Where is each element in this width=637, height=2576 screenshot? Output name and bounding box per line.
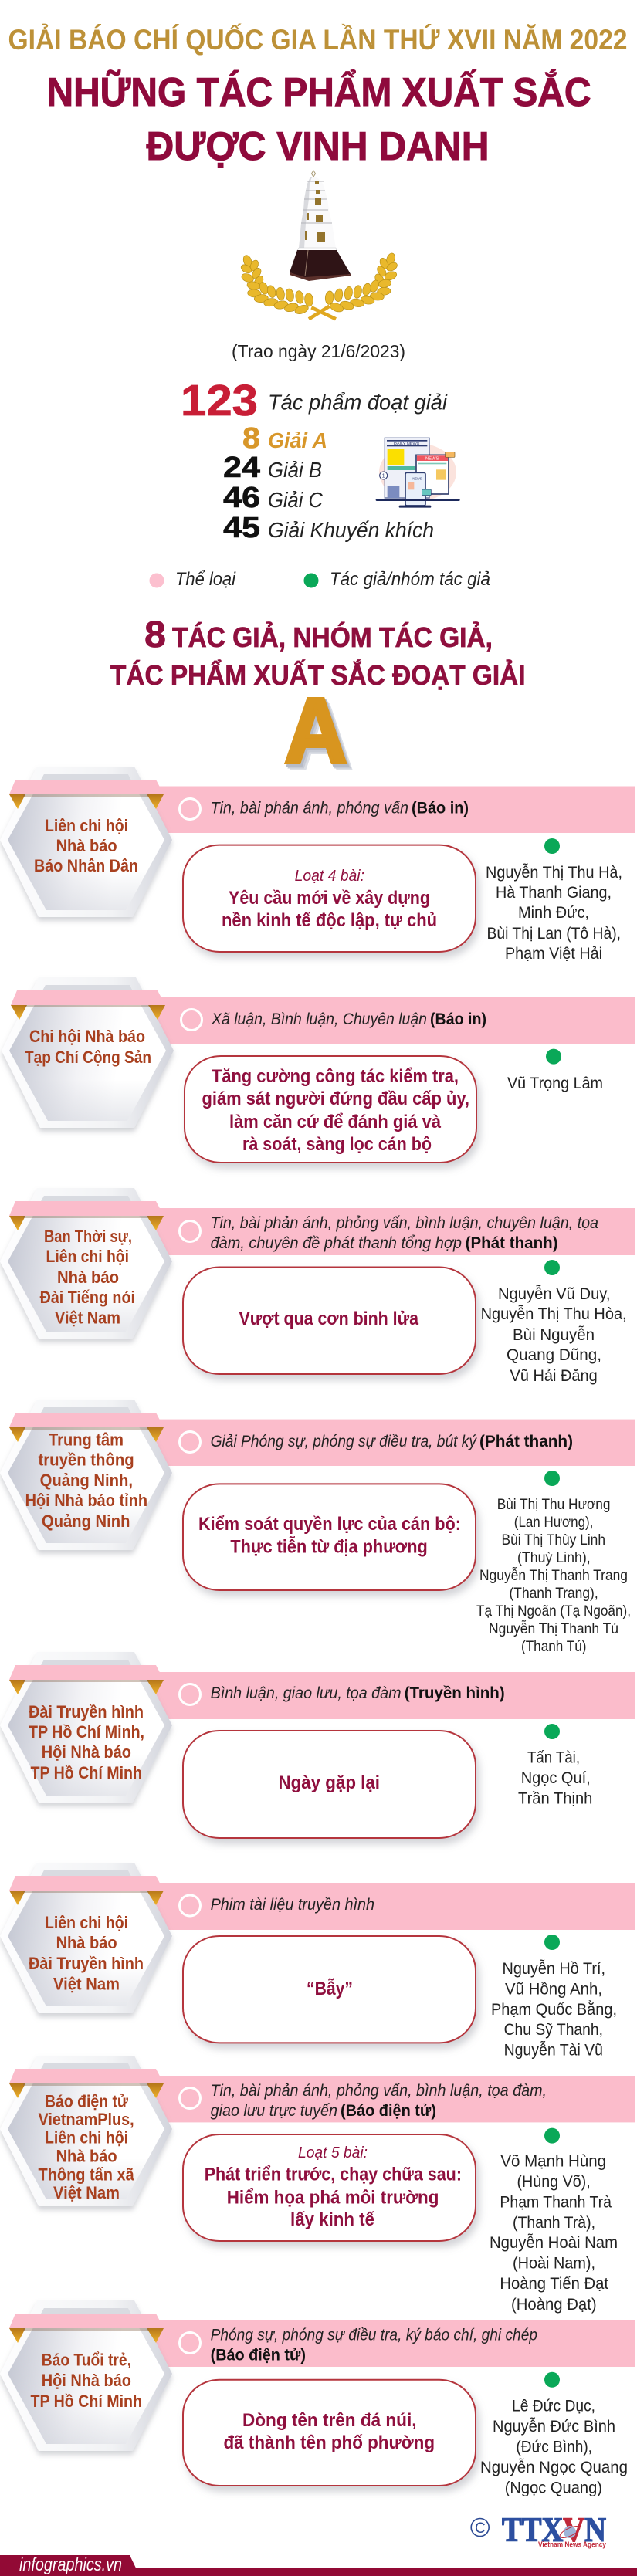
- panel: block 6: [0, 1863, 635, 2060]
- organisation: [39, 2092, 134, 2202]
- panel: block 3: [0, 1188, 635, 1385]
- category: (Báo điện tử): [341, 2101, 436, 2120]
- authors: Chu Sỹ Thanh,: [504, 2020, 603, 2039]
- stats: prize counts: Giải A: [268, 428, 327, 452]
- work title box: [183, 2380, 476, 2486]
- authors: Bùi Thị Thùy Linh: [502, 1532, 605, 1549]
- title: main heading: [46, 69, 591, 169]
- stats: prize counts: Giải C: [268, 488, 324, 512]
- organisation: Quảng Ninh: [42, 1511, 130, 1531]
- category: (Truyền hình): [405, 1684, 505, 1702]
- authors: Quang Dũng,: [507, 1346, 601, 1364]
- icon: newspaper, tablet and phone: NEWS: [412, 476, 422, 480]
- authors: [476, 1496, 631, 1655]
- work title box: [183, 1268, 476, 1374]
- category: (Phát thanh): [479, 1432, 573, 1450]
- icon: newspaper, tablet and phone: DAILY NEWS: [394, 442, 420, 446]
- stats: prize counts: 46: [223, 482, 260, 514]
- organisation: Trung tâm: [49, 1430, 124, 1450]
- organisation: Nhà báo: [56, 2146, 117, 2166]
- authors: Võ Mạnh Hùng: [500, 2152, 606, 2171]
- icon: tower trophy with golden wheat wreath: [239, 171, 398, 319]
- organisation: Liên chi hội: [45, 816, 128, 835]
- work title box: Tăng cường công tác kiểm tra,: [212, 1066, 459, 1087]
- award date: (Trao ngày 21/6/2023): [232, 341, 405, 361]
- authors: Bùi Thị Thu Hương: [497, 1496, 610, 1513]
- authors: (Thanh Tú): [521, 1638, 587, 1655]
- work title box: [183, 1484, 476, 1590]
- organisation: Liên chi hội: [45, 2128, 128, 2148]
- work title box: Vượt qua cơn binh lửa: [239, 1308, 418, 1329]
- authors: Nguyễn Hồ Trí,: [502, 1958, 605, 1978]
- organisation: [31, 2351, 142, 2411]
- organisation: [34, 816, 138, 875]
- category: (Báo điện tử): [211, 2345, 306, 2364]
- category: Xã luận, Bình luận, Chuyên luận: [211, 1010, 427, 1028]
- authors: [480, 2397, 628, 2497]
- authors: (Thanh Trà),: [513, 2213, 595, 2232]
- icon: newspaper, tablet and phone: [376, 438, 460, 508]
- work title box: Loạt 5 bài:: [298, 2144, 368, 2161]
- work title box: nền kinh tế độc lập, tự chủ: [222, 910, 437, 931]
- organisation: Quảng Ninh,: [40, 1471, 133, 1490]
- organisation: Việt Nam: [53, 2183, 120, 2202]
- category: (Phát thanh): [466, 1234, 558, 1252]
- authors: Nguyễn Ngọc Quang: [480, 2457, 628, 2476]
- organisation: Việt Nam: [55, 1308, 120, 1328]
- stats: prize counts: 8: [242, 422, 260, 455]
- organisation: Hội Nhà báo tỉnh: [25, 1491, 147, 1510]
- authors: (Thuỳ Linh),: [517, 1549, 591, 1566]
- authors: (Thanh Trang),: [510, 1585, 598, 1602]
- work title box: Dòng tên trên đá núi,: [242, 2410, 417, 2431]
- organisation: Thông tấn xã: [39, 2165, 134, 2184]
- authors: Minh Đức,: [518, 903, 589, 922]
- panel: block 8: [0, 2300, 635, 2497]
- work title box: đã thành tên phố phường: [224, 2432, 435, 2453]
- category: Bình luận, giao lưu, tọa đàm: [211, 1684, 402, 1702]
- panel: block 1: [0, 767, 635, 963]
- title: main heading: ĐƯỢC VINH DANH: [147, 124, 490, 169]
- authors: Lê Đức Dục,: [512, 2397, 595, 2415]
- organisation: VietnamPlus,: [39, 2110, 134, 2129]
- logo: TTXVN Vietnam News Agency: Vietnam News Agency: [538, 2540, 606, 2549]
- authors: Nguyễn Vũ Duy,: [498, 1284, 610, 1303]
- panel: block 4: [0, 1400, 635, 1655]
- big letter A: A: [284, 679, 347, 783]
- organisation: Nhà báo: [56, 836, 117, 855]
- stats: prize counts: 24: [223, 452, 260, 484]
- authors: (Ngọc Quang): [505, 2479, 602, 2497]
- work title box: Loạt 4 bài:: [295, 867, 364, 885]
- legend: Thể loại: [175, 569, 236, 590]
- authors: Nguyễn Đức Bình: [493, 2416, 615, 2436]
- work title box: [185, 1056, 476, 1163]
- stats: prize counts: 123: [181, 376, 258, 425]
- authors: [486, 862, 622, 963]
- stats: prize counts: [181, 376, 448, 544]
- authors: Phạm Thanh Trà: [500, 2192, 612, 2211]
- organisation: truyền thông: [39, 1450, 134, 1470]
- category: Phóng sự, phóng sự điều tra, ký báo chí, ghi chép: [211, 2326, 537, 2344]
- authors: Tấn Tài,: [527, 1748, 580, 1767]
- legend: [150, 569, 490, 590]
- work title box: [183, 1731, 476, 1838]
- authors: Nguyễn Hoài Nam: [490, 2232, 618, 2252]
- work title box: Yêu cầu mới về xây dựng: [229, 888, 430, 909]
- logo: TTXVN Vietnam News Agency: TTXVN: [502, 2511, 606, 2549]
- organisation: Đài Truyền hình: [29, 1702, 144, 1721]
- big letter A: A: [290, 685, 352, 789]
- work title box: [183, 845, 476, 952]
- authors: Nguyễn Thị Thanh Tú: [489, 1620, 618, 1637]
- panel: block 2: [2, 977, 635, 1163]
- organisation: Báo Tuổi trẻ,: [42, 2351, 131, 2370]
- organisation: TP Hồ Chí Minh: [31, 1763, 142, 1782]
- work title box: giám sát người đứng đầu cấp ủy,: [202, 1088, 469, 1109]
- category: Giải Phóng sự, phóng sự điều tra, bút ký: [211, 1432, 477, 1450]
- organisation: Hội Nhà báo: [42, 1742, 131, 1762]
- stats: prize counts: 45: [223, 512, 260, 544]
- organisation: [25, 1027, 151, 1067]
- footer bar: [0, 2554, 637, 2576]
- authors: Nguyễn Thị Thu Hà,: [486, 862, 622, 882]
- authors: Vũ Hải Đăng: [510, 1366, 598, 1385]
- organisation: Chi hội Nhà báo: [29, 1027, 145, 1046]
- organisation: [40, 1227, 135, 1328]
- stats: prize counts: Tác phẩm đoạt giải: [268, 391, 448, 415]
- category: [211, 1214, 598, 1252]
- icon: newspaper, tablet and phone: 1: [382, 472, 385, 479]
- organisation: Liên chi hội: [45, 1913, 128, 1932]
- footer bar: infographics.vn: [19, 2554, 122, 2575]
- big letter A: A: [288, 684, 351, 787]
- organisation: TP Hồ Chí Minh,: [29, 1722, 144, 1742]
- organisation: Đài Tiếng nói: [40, 1288, 135, 1307]
- organisation: Nhà báo: [56, 1933, 117, 1952]
- title: main heading: NHỮNG TÁC PHẨM XUẤT SẮC: [46, 69, 591, 115]
- panel: block 5: [0, 1652, 635, 1838]
- organisation: [25, 1430, 147, 1531]
- organisation: Việt Nam: [53, 1975, 120, 1993]
- icon: newspaper, tablet and phone: NEWS: [425, 457, 439, 462]
- work title box: Hiểm họa phá môi trường: [227, 2188, 439, 2209]
- organisation: [29, 1913, 144, 1993]
- work title box: lấy kinh tế: [290, 2209, 374, 2230]
- big letter A: A: [286, 682, 349, 784]
- stats: prize counts: Giải B: [268, 458, 322, 482]
- organisation: Đài Truyền hình: [29, 1954, 144, 1973]
- logo: TTXVN Vietnam News Agency: C: [475, 2520, 486, 2537]
- authors: (Hoàng Đạt): [511, 2295, 597, 2314]
- authors: [491, 1958, 617, 2060]
- authors: Nguyễn Thị Thu Hòa,: [481, 1304, 627, 1323]
- organisation: Báo điện tử: [45, 2092, 128, 2111]
- category: [211, 2081, 547, 2120]
- authors: (Lan Hương),: [514, 1514, 593, 1531]
- category: (Báo in): [412, 799, 469, 817]
- category: Tin, bài phản ánh, phỏng vấn, bình luận, chuyên luận, tọa: [211, 1214, 598, 1232]
- legend: Tác giả/nhóm tác giả: [330, 569, 490, 590]
- category: Tin, bài phản ánh, phỏng vấn, bình luận, tọa đàm,: [211, 2081, 547, 2100]
- authors: Bùi Thị Lan (Tô Hà),: [486, 924, 621, 943]
- panel: block 7: [0, 2056, 635, 2314]
- category: đàm, chuyên đề phát thanh tổng hợp: [211, 1234, 462, 1252]
- work title box: [183, 1936, 476, 2043]
- authors: [518, 1748, 592, 1807]
- authors: Phạm Việt Hải: [505, 944, 602, 963]
- organisation: Liên chi hội: [46, 1247, 129, 1266]
- category: giao lưu trực tuyến: [211, 2101, 337, 2120]
- category: [211, 2326, 537, 2364]
- authors: Ngọc Quí,: [521, 1769, 591, 1787]
- organisation: Ban Thời sự,: [44, 1227, 132, 1246]
- authors: Phạm Quốc Bằng,: [491, 1999, 617, 2019]
- category: Phim tài liệu truyền hình: [211, 1895, 374, 1914]
- authors: Vũ Hồng Anh,: [505, 1980, 602, 1999]
- authors: [490, 2152, 618, 2314]
- section heading: [110, 614, 525, 691]
- work title box: Kiểm soát quyền lực của cán bộ:: [198, 1514, 461, 1535]
- section heading: TÁC PHẨM XUẤT SẮC ĐOẠT GIẢI: [110, 658, 525, 691]
- work title box: rà soát, sàng lọc cán bộ: [242, 1134, 432, 1155]
- organisation: Hội Nhà báo: [42, 2371, 131, 2390]
- authors: (Đức Bình),: [516, 2438, 592, 2456]
- organisation: Báo Nhân Dân: [34, 856, 138, 875]
- organisation: Nhà báo: [57, 1268, 119, 1287]
- work title box: Phát triển trước, chạy chữa sau:: [205, 2164, 462, 2185]
- authors: (Hùng Võ),: [517, 2172, 591, 2191]
- authors: [481, 1284, 627, 1385]
- section heading: 8: [144, 614, 166, 655]
- work title box: Thực tiễn từ địa phương: [230, 1536, 428, 1558]
- work title box: Ngày gặp lại: [278, 1772, 380, 1793]
- work title box: [183, 2134, 476, 2241]
- authors: Bùi Nguyễn: [513, 1325, 595, 1344]
- organisation: TP Hồ Chí Minh: [31, 2392, 142, 2411]
- authors: Nguyễn Tài Vũ: [504, 2039, 603, 2060]
- stats: prize counts: Giải Khuyến khích: [268, 518, 434, 542]
- section heading: TÁC GIẢ, NHÓM TÁC GIẢ,: [172, 621, 493, 653]
- authors: (Hoài Nam),: [513, 2254, 595, 2273]
- organisation: [29, 1702, 144, 1782]
- category: Tin, bài phản ánh, phỏng vấn: [211, 799, 408, 817]
- work title box: làm căn cứ để đánh giá và: [229, 1112, 441, 1132]
- authors: Hà Thanh Giang,: [496, 883, 612, 902]
- category: (Báo in): [430, 1010, 486, 1028]
- authors: Hoàng Tiến Đạt: [500, 2274, 608, 2293]
- authors: Trần Thịnh: [518, 1789, 592, 1807]
- organisation: Tạp Chí Cộng Sản: [25, 1048, 151, 1067]
- authors: Vũ Trọng Lâm: [507, 1074, 603, 1092]
- work title box: “Bẫy”: [307, 1978, 353, 1999]
